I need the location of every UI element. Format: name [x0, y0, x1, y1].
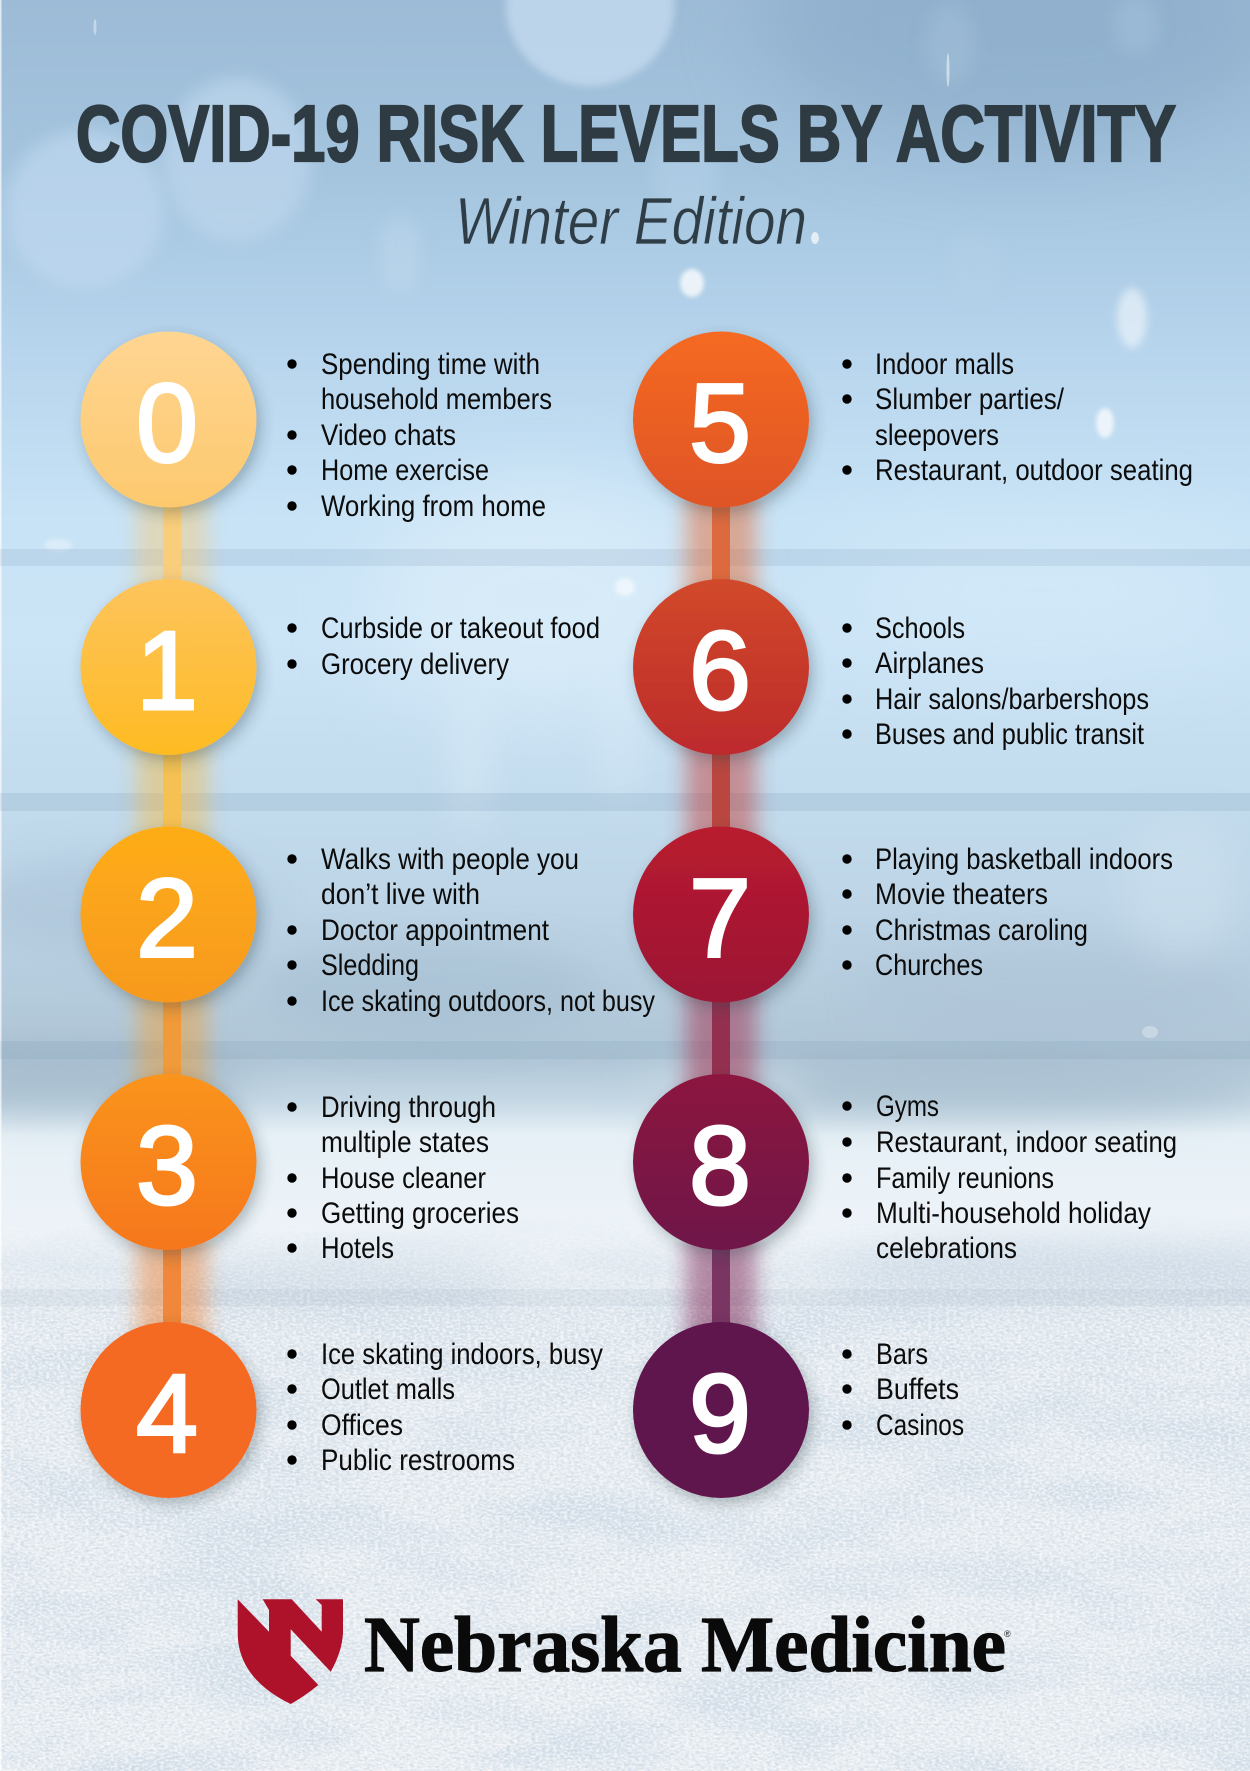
- activities for level 3: Getting groceries: [321, 1197, 519, 1230]
- activities for level 5: sleepovers: [875, 419, 999, 452]
- activities for level 0: Working from home: [321, 490, 546, 523]
- subtitle: Winter Edition: [455, 184, 807, 259]
- activities for level 7: Playing basketball indoors: [875, 843, 1173, 876]
- activities for level 9: [842, 1338, 964, 1442]
- activities for level 2: Doctor appointment: [321, 914, 550, 947]
- risk badge 5: [633, 332, 809, 508]
- activities for level 7: Churches: [875, 949, 983, 982]
- activities for level 2: Ice skating outdoors, not busy: [321, 985, 655, 1018]
- activities for level 2: [287, 843, 655, 1018]
- activities for level 2: don’t live with: [321, 878, 480, 911]
- activities for level 8: Gyms: [876, 1090, 939, 1123]
- activities for level 4: [287, 1338, 603, 1477]
- activities for level 2: Walks with people you: [321, 843, 579, 876]
- activities for level 8: [842, 1090, 1177, 1265]
- level 4: [80, 1322, 603, 1498]
- activities for level 4: Outlet malls: [321, 1373, 455, 1406]
- activities for level 6: Schools: [875, 612, 965, 645]
- activities for level 3: multiple states: [321, 1126, 489, 1159]
- risk badge 0: [80, 332, 256, 508]
- activities for level 7: [842, 843, 1173, 982]
- activities for level 4: Offices: [321, 1409, 403, 1442]
- activities for level 1: Curbside or takeout food: [321, 612, 600, 645]
- risk badge 8: [633, 1074, 809, 1250]
- activities for level 9: Buffets: [876, 1373, 959, 1406]
- activities for level 0: [287, 348, 552, 523]
- activities for level 8: Family reunions: [876, 1162, 1054, 1195]
- wordmark: Nebraska Medicine: [364, 1602, 1006, 1689]
- activities for level 5: Slumber parties/: [875, 383, 1065, 416]
- activities for level 3: House cleaner: [321, 1162, 486, 1195]
- left connector column: [137, 500, 207, 1332]
- activities for level 7: Movie theaters: [875, 878, 1048, 911]
- activities for level 1: [287, 612, 600, 681]
- level 7: [633, 826, 1173, 1002]
- icon: red N shield: [238, 1599, 343, 1704]
- activities for level 4: Public restrooms: [321, 1444, 515, 1477]
- level 1: [80, 579, 600, 755]
- activities for level 3: [287, 1091, 519, 1265]
- horizontal translucent bands: [0, 549, 1250, 1306]
- activities for level 7: Christmas caroling: [875, 914, 1088, 947]
- risk badge 2: [80, 826, 256, 1002]
- activities for level 9: Bars: [876, 1338, 928, 1371]
- risk badge 3: 3: [136, 1104, 198, 1228]
- level 6: [633, 579, 1149, 755]
- level 3: [80, 1074, 519, 1265]
- risk badge 6: 6: [689, 609, 751, 733]
- level 9: [633, 1322, 964, 1498]
- risk badge 7: 7: [689, 856, 751, 980]
- logo: Nebraska Medicine: [238, 1599, 1011, 1704]
- risk badge 1: 1: [136, 609, 198, 733]
- risk badge 2: 2: [136, 856, 198, 980]
- risk badge 8: 8: [689, 1104, 751, 1228]
- risk badge 1: [80, 579, 256, 755]
- risk badge 5: 5: [689, 362, 751, 486]
- activities for level 0: Home exercise: [321, 454, 489, 487]
- level 2: [80, 826, 655, 1018]
- activities for level 0: household members: [321, 383, 552, 416]
- activities for level 9: Casinos: [876, 1409, 964, 1442]
- risk badge 4: [80, 1322, 256, 1498]
- activities for level 1: Grocery delivery: [321, 648, 509, 681]
- risk badge 9: 9: [689, 1352, 751, 1476]
- activities for level 5: [842, 348, 1193, 487]
- level 0: [80, 332, 552, 523]
- risk badge 7: [633, 826, 809, 1002]
- risk badge 0: 0: [136, 362, 198, 486]
- risk badge 9: [633, 1322, 809, 1498]
- activities for level 0: Video chats: [321, 419, 456, 452]
- activities for level 6: Airplanes: [875, 647, 984, 680]
- activities for level 8: Restaurant, indoor seating: [876, 1126, 1177, 1159]
- activities for level 6: Hair salons/barbershops: [875, 683, 1149, 716]
- right connector column: [686, 500, 756, 1332]
- activities for level 8: Multi-household holiday: [876, 1197, 1151, 1230]
- activities for level 5: Indoor malls: [875, 348, 1014, 381]
- activities for level 6: Buses and public transit: [875, 718, 1145, 751]
- level 5: [633, 332, 1193, 508]
- risk badge 4: 4: [136, 1352, 198, 1476]
- activities for level 5: Restaurant, outdoor seating: [875, 454, 1193, 487]
- risk badge 3: [80, 1074, 256, 1250]
- activities for level 2: Sledding: [321, 949, 419, 982]
- activities for level 3: Driving through: [321, 1091, 496, 1124]
- risk badge 6: [633, 579, 809, 755]
- activities for level 0: Spending time with: [321, 348, 540, 381]
- registered mark: ®: [1004, 1629, 1011, 1639]
- activities for level 8: celebrations: [876, 1232, 1017, 1265]
- level 8: [633, 1074, 1177, 1265]
- activities for level 3: Hotels: [321, 1232, 394, 1265]
- activities for level 6: [842, 612, 1149, 751]
- activities for level 4: Ice skating indoors, busy: [321, 1338, 603, 1371]
